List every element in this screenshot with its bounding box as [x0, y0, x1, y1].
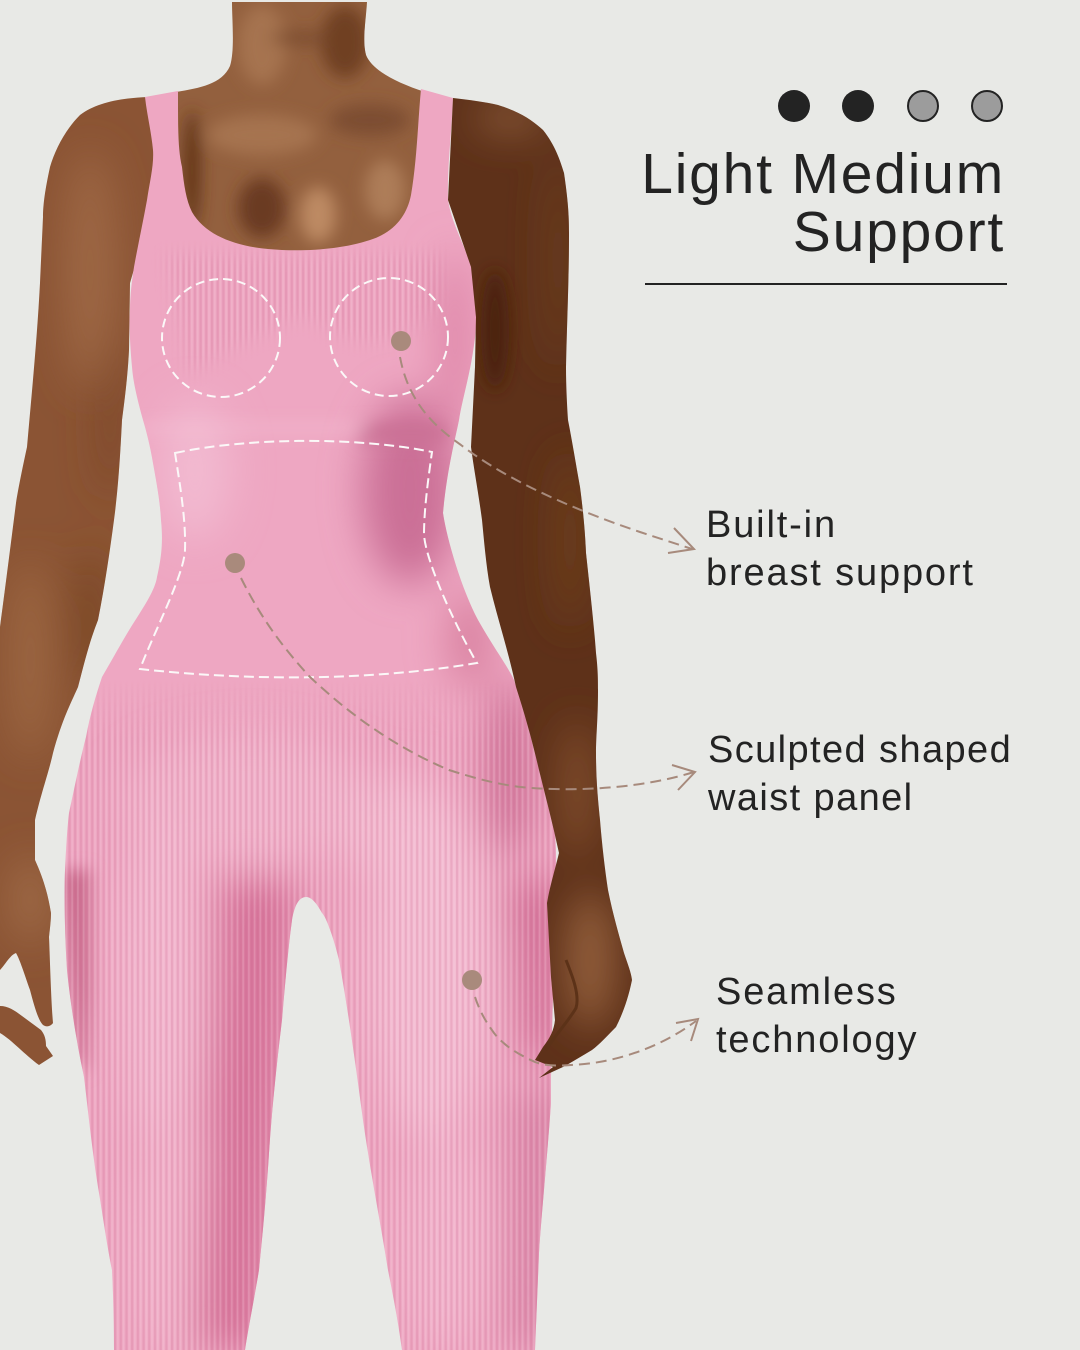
title [641, 142, 1005, 264]
title underline [645, 283, 1007, 285]
dot filled 2 [842, 90, 874, 122]
callout: seamless: technology [716, 1019, 918, 1061]
icon: breast cup outlines [162, 278, 448, 397]
arrow: waist panel [241, 578, 695, 790]
callout: seamless [716, 971, 918, 1061]
skin: right arm and hand [440, 90, 640, 1080]
title: Support [793, 200, 1005, 264]
arrow: breast support [400, 357, 694, 553]
skin: left arm and hand [0, 97, 154, 1065]
icon: waist panel outline [140, 441, 477, 677]
skin: neck and chest [178, 2, 421, 250]
callout: waist panel: Sculpted shaped [708, 729, 1012, 771]
callout: waist panel: waist panel [708, 777, 914, 819]
model illustration wearing pink bodysuit [0, 2, 700, 1350]
marker dots [225, 331, 482, 990]
dot empty 3 [907, 90, 939, 122]
callout: breast support: Built-in [706, 504, 837, 546]
dot empty 4 [971, 90, 1003, 122]
dot filled 1 [778, 90, 810, 122]
support level dots [778, 90, 1003, 122]
title: Light Medium [641, 142, 1005, 206]
arrow: seamless technology [475, 997, 698, 1066]
callout: seamless: Seamless [716, 971, 898, 1013]
bodysuit silhouette with shading and ribs [50, 80, 570, 1350]
callout: waist panel [708, 729, 1012, 819]
callout: breast support: breast support [706, 552, 975, 594]
callout: breast support [706, 504, 975, 594]
